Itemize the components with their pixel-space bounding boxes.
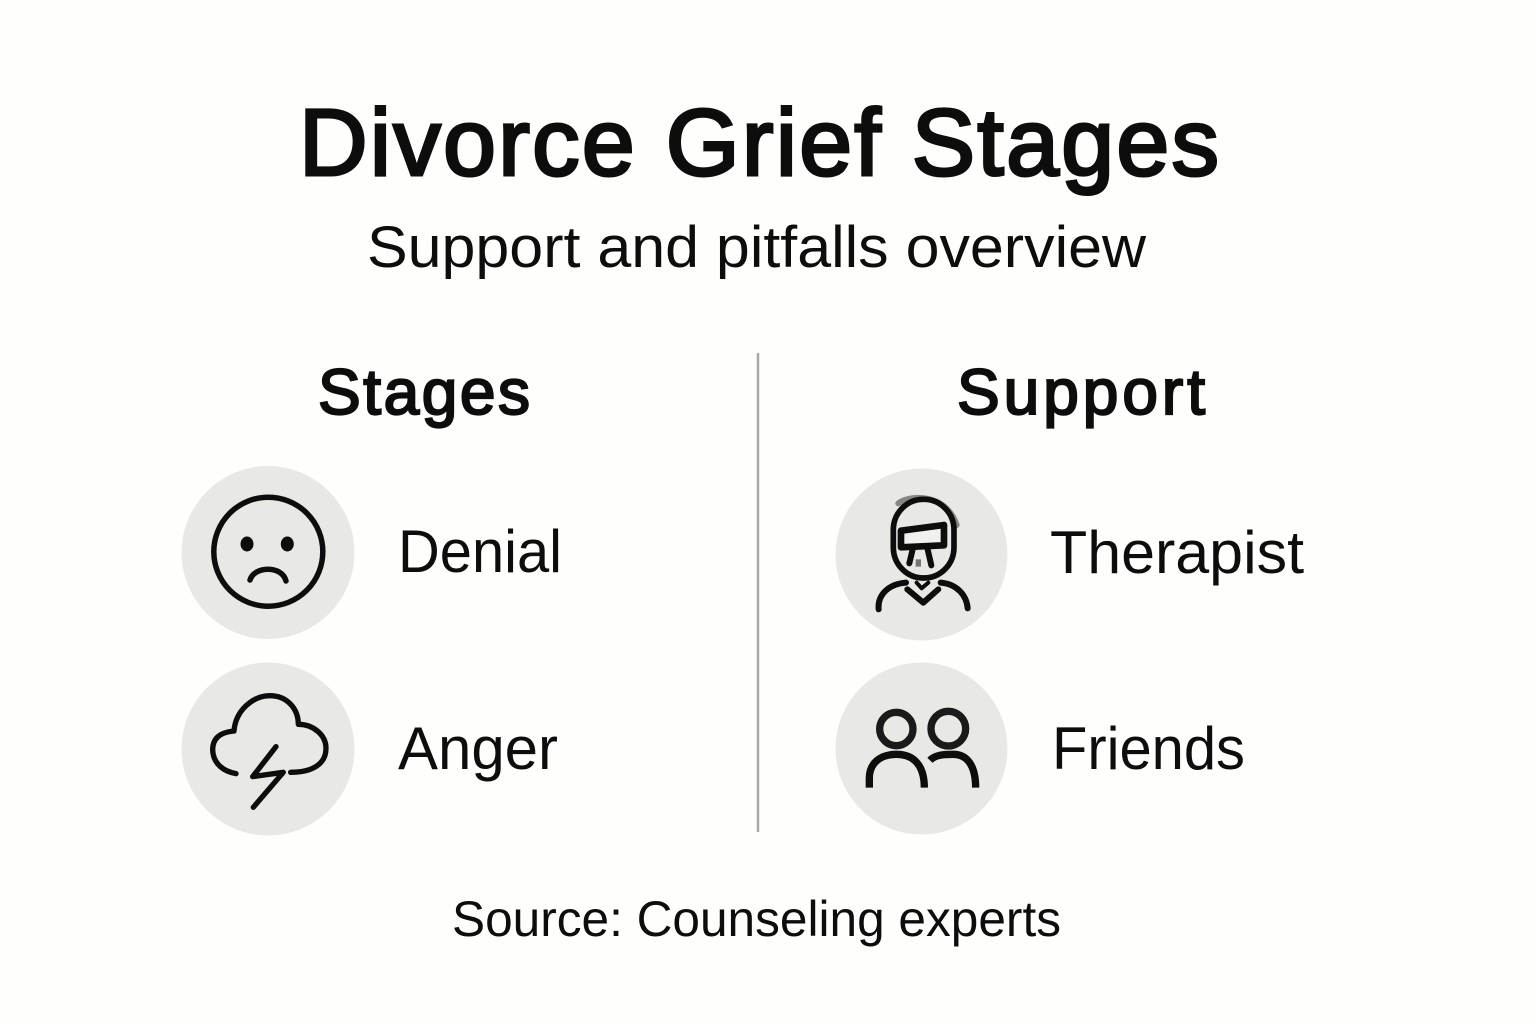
label: therapist: Therapist	[1050, 519, 1304, 586]
label: friends: Friends	[1052, 715, 1245, 782]
icon: therapist	[836, 468, 1008, 640]
subtitle: Support and pitfalls overview	[367, 215, 1147, 280]
icon: storm cloud	[182, 662, 354, 836]
heading: support: Support	[957, 356, 1205, 428]
center divider	[757, 353, 759, 832]
heading: stages: Stages	[318, 356, 530, 428]
source note: Source: Counseling experts	[452, 891, 1061, 947]
icon: two people	[836, 662, 1008, 834]
support item: friends	[836, 662, 1245, 834]
label: anger: Anger	[398, 715, 558, 782]
title: Divorce Grief Stages	[299, 90, 1219, 196]
stage item: denial	[182, 466, 562, 639]
stage item: anger	[182, 662, 558, 836]
label: denial: Denial	[398, 518, 562, 585]
support item: therapist	[836, 468, 1304, 640]
icon: sad face	[182, 466, 354, 639]
